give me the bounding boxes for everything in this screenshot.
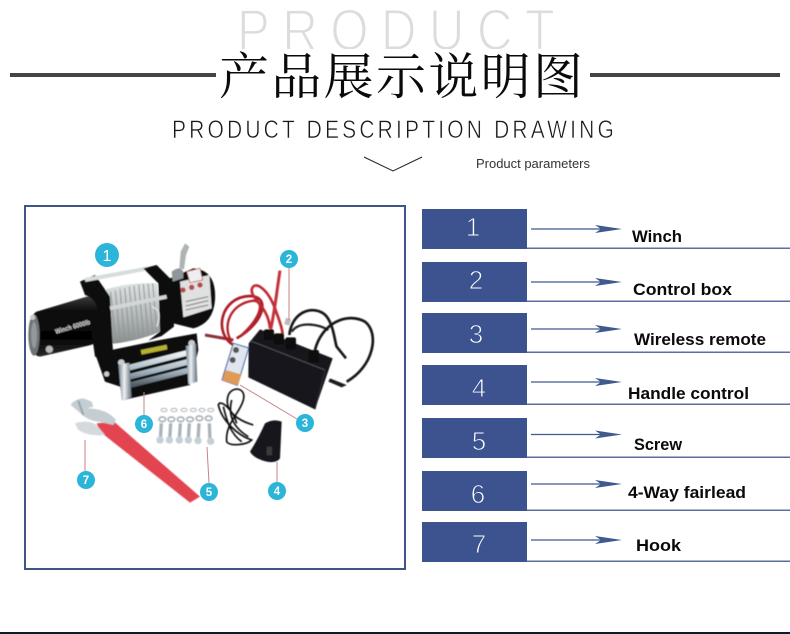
row 7: hook xyxy=(422,522,790,562)
badge 6: 6 xyxy=(141,419,147,431)
badge 4: 4 xyxy=(274,486,281,498)
panel: product photo illustration xyxy=(25,206,405,569)
illustration: hook with red strap xyxy=(71,398,200,503)
right title rule xyxy=(590,73,780,77)
row 1: winch: 1 xyxy=(466,212,480,242)
row 6: 4-way fairlead: 4-Way fairlead xyxy=(628,484,746,502)
left title rule xyxy=(10,73,216,77)
row 3: wireless remote: Wireless remote xyxy=(634,331,766,349)
badge 7: 7 xyxy=(83,475,89,487)
illustration: winch xyxy=(28,243,215,401)
row 4: handle control: 4 xyxy=(472,373,486,403)
row 5: screw: Screw xyxy=(634,436,682,454)
badge 7 xyxy=(77,471,95,489)
row 1: winch: Winch xyxy=(632,228,682,246)
illustration: control box and remote xyxy=(205,271,373,409)
row 3: wireless remote: 3 xyxy=(469,319,483,349)
row 7: hook: Hook xyxy=(636,537,682,555)
row 4: handle control xyxy=(422,365,790,405)
caption: product parameters: Product parameters xyxy=(476,156,590,171)
illustration: handle control with cord xyxy=(218,389,282,462)
row 2: control box: Control box xyxy=(633,281,733,299)
background title: PRODUCT: PRODUCT xyxy=(237,0,555,63)
badge 2: 2 xyxy=(286,254,292,266)
row 6: 4-way fairlead xyxy=(422,471,790,511)
row 2: control box: 2 xyxy=(469,265,483,295)
row 6: 4-way fairlead: 6 xyxy=(471,479,485,509)
badge 2 xyxy=(280,250,298,268)
row 5: screw xyxy=(422,418,790,458)
row 7: hook: 7 xyxy=(472,529,486,559)
row 5: screw: 5 xyxy=(472,426,486,456)
leader lines xyxy=(85,268,297,483)
badge 1: 1 xyxy=(103,248,112,265)
row 4: handle control: Handle control xyxy=(628,385,749,403)
badge 5: 5 xyxy=(206,487,213,499)
illustration: screws and washers xyxy=(156,408,214,445)
row 2: control box xyxy=(422,262,790,302)
badge 3 xyxy=(296,414,314,432)
badge 1 xyxy=(95,243,119,267)
row 1: winch xyxy=(422,209,790,249)
badge 6 xyxy=(135,415,153,433)
row 3: wireless remote xyxy=(422,313,790,353)
badge 3: 3 xyxy=(302,418,308,430)
badge 5 xyxy=(200,483,218,501)
bottom page rule xyxy=(0,632,790,634)
icon: chevron down xyxy=(364,157,422,171)
title: Chinese heading: 产品展示说明图 xyxy=(219,49,583,105)
badge 4 xyxy=(268,482,286,500)
subtitle: PRODUCT DESCRIPTION DRAWING xyxy=(172,115,614,143)
illustration: winch: Winch 6000lb xyxy=(55,319,91,336)
